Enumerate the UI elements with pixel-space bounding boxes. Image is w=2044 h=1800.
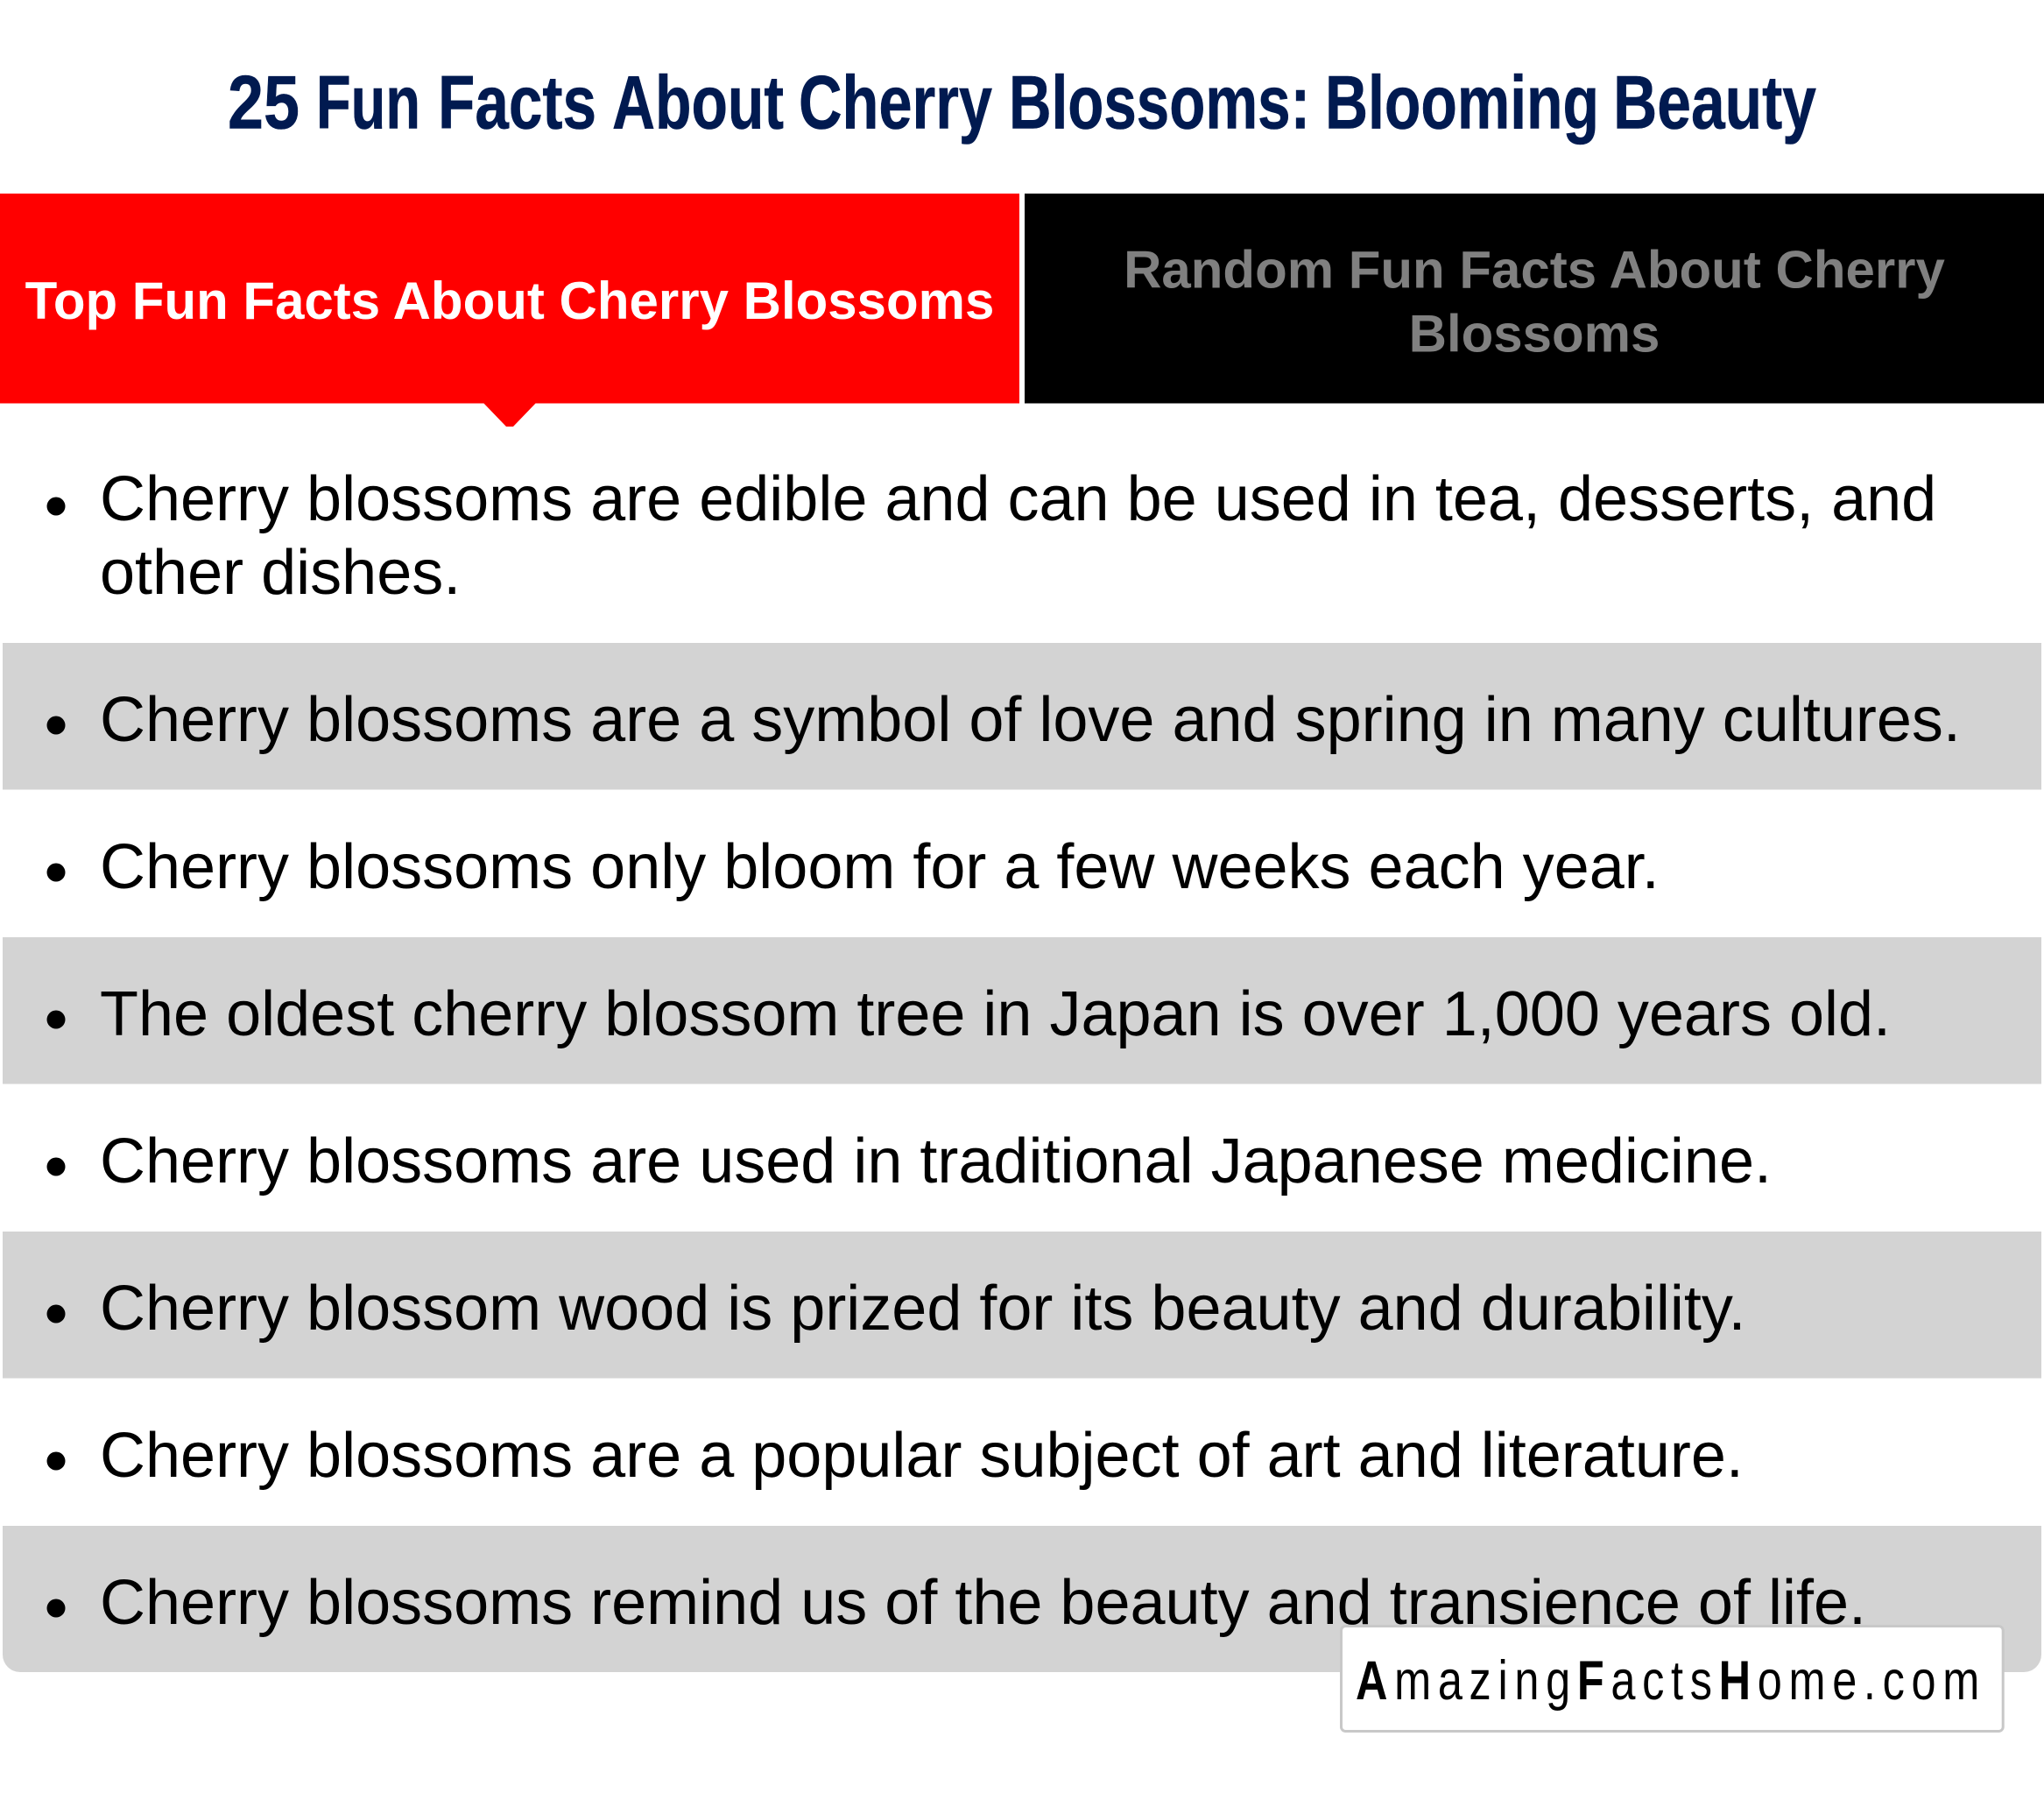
tab: random fun facts (inactive): Random Fun Facts About Cherry (1124, 240, 1946, 300)
watermark badge (1342, 1626, 2003, 1731)
fact 6 (3, 1232, 2041, 1379)
title (228, 61, 1816, 145)
fact 2: Cherry blossoms are a symbol of love and spring in many cultures. (100, 685, 1961, 755)
fact 1: Cherry blossoms are edible and can be used in tea, desserts, and (100, 464, 1936, 534)
fact 3: Cherry blossoms only bloom for a few weeks each year. (100, 832, 1660, 902)
tab: top fun facts (active) (0, 194, 1019, 427)
title: Facts (438, 61, 596, 145)
tab: top fun facts (active): Top Fun Facts About Cherry Blossoms (25, 272, 994, 330)
watermark badge: AmazingFactsHome.com (1356, 1650, 1986, 1712)
title: About (612, 61, 784, 145)
title: Blooming (1325, 61, 1599, 145)
title: Blossoms: (1009, 61, 1310, 145)
fact 6: Cherry blossom wood is prized for its beauty and durability. (100, 1274, 1746, 1344)
fact 4 (3, 937, 2041, 1084)
tab: random fun facts (inactive) (1025, 194, 2044, 403)
fact 7: Cherry blossoms are a popular subject of art and literature. (100, 1421, 1744, 1491)
fact 1 (47, 464, 1936, 608)
fact 8 (3, 1526, 2041, 1672)
fact 1: other dishes. (100, 538, 461, 608)
fact list (3, 464, 2041, 1672)
title: Beauty (1613, 61, 1816, 145)
fact 5: Cherry blossoms are used in traditional Japanese medicine. (100, 1126, 1772, 1196)
fact 2 (3, 643, 2041, 790)
title: Fun (316, 61, 420, 145)
tab: random fun facts (inactive): Blossoms (1409, 305, 1660, 363)
fact 8: Cherry blossoms remind us of the beauty and transience of life. (100, 1568, 1866, 1638)
fact 4: The oldest cherry blossom tree in Japan is over 1,000 years old. (100, 979, 1891, 1049)
title: Cherry (799, 61, 992, 145)
title: 25 (228, 61, 300, 145)
